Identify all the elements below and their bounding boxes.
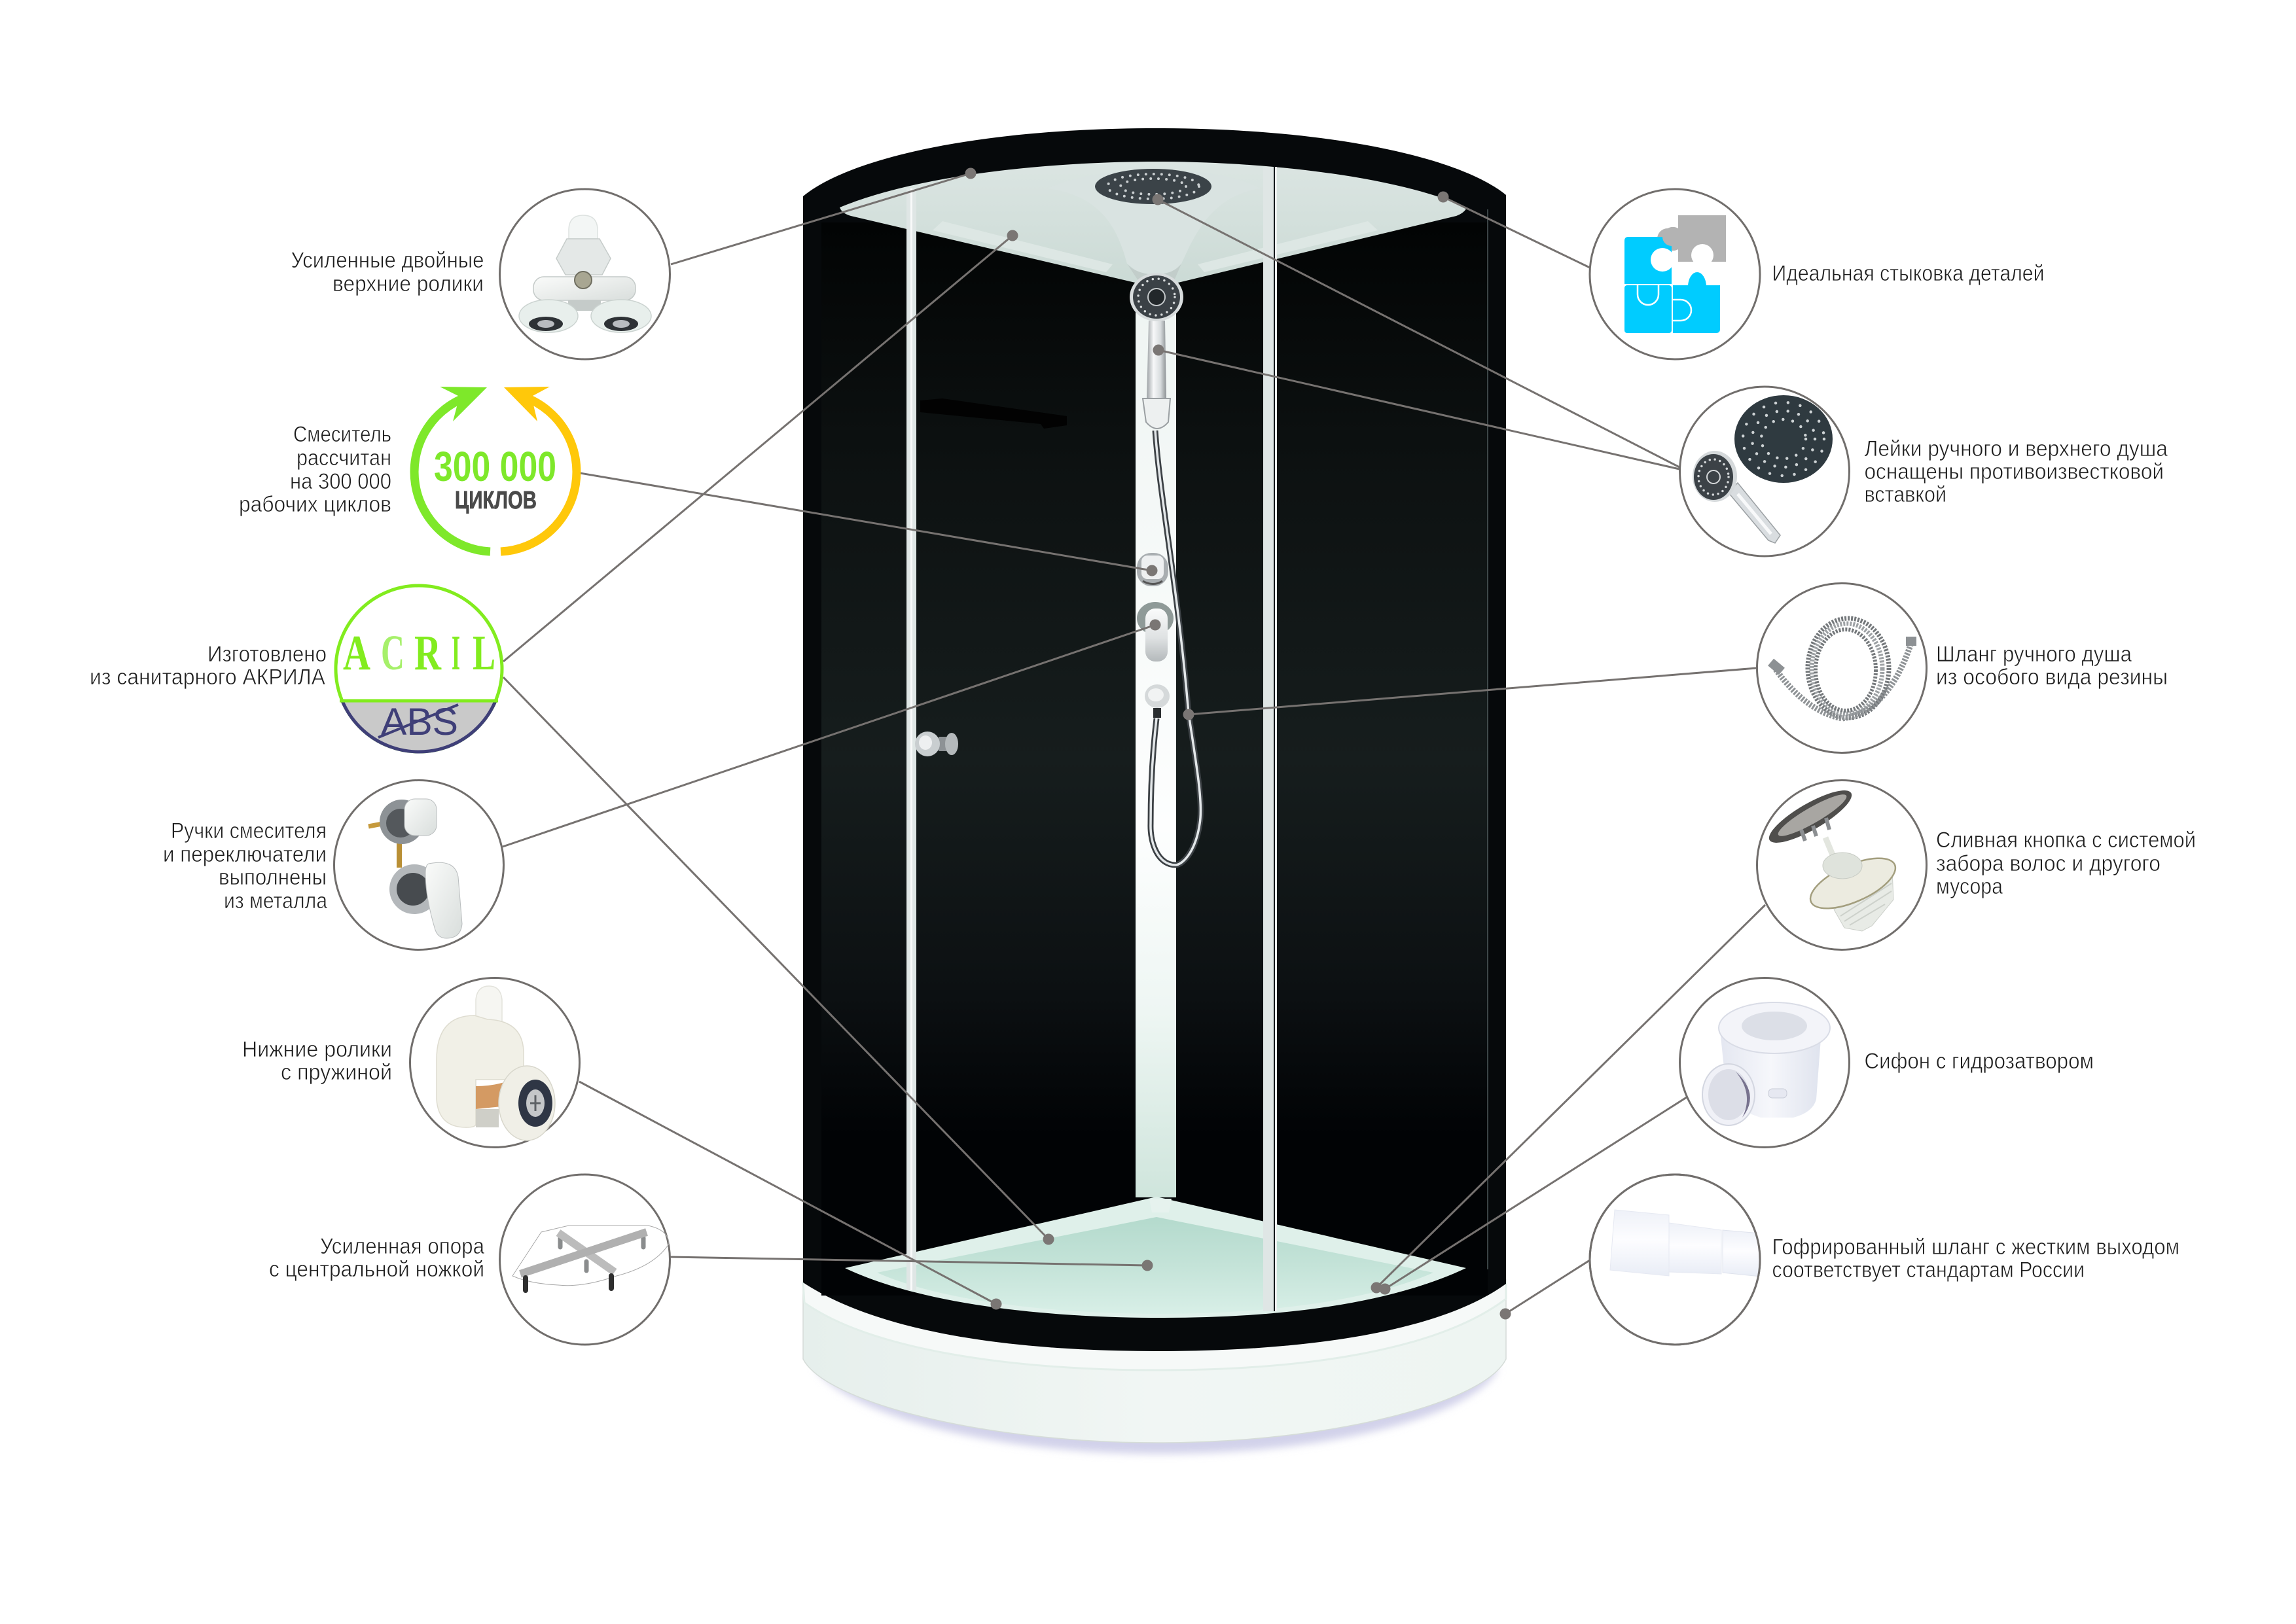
label: drain button: Сливная кнопка с системой [1936,828,2196,853]
label: drain button: мусора [1936,874,2003,899]
label: drain button: забора волос и другого [1936,851,2161,876]
icon: shower heads [1679,387,1850,556]
label: shower heads: Лейки ручного и верхнего душа [1864,436,2168,461]
badge: 300 000 cycles [414,387,577,552]
label: lower rollers [242,1037,392,1085]
label: corrugated hose: Гофрированный шланг с жестким выходом [1772,1235,2179,1260]
label: mixer cycles: на 300 000 [290,469,391,494]
label: reinforced support: с центральной ножкой [269,1257,484,1282]
cabin body [803,128,1506,1351]
connector: siphon [1380,1097,1687,1294]
label: sanitary acrylic: из санитарного АКРИЛА [90,665,325,690]
door frame strips [906,167,1488,1311]
connector: lower rollers [579,1082,1001,1310]
label: metal handles: и переключатели [163,842,327,867]
label: shower heads: вставкой [1864,482,1946,507]
connector: metal handles [503,619,1161,847]
back wall panels [821,222,1488,1296]
badge: 300 000 cycles: 300 000 [434,443,556,490]
infographic canvas [92,128,2195,1457]
icon: shower hose coil [1757,584,1927,752]
shower hose [1151,431,1200,865]
connector: mixer cycles [580,473,1157,576]
label: metal handles: из металла [224,889,327,913]
connector: upper double rollers [671,168,977,264]
connector: perfect fit [1437,191,1590,268]
label: sanitary acrylic [90,642,327,690]
label: sanitary acrylic: Изготовлено [207,642,327,667]
badge: acril not abs: A [343,626,370,680]
towel rail [920,398,1067,429]
connector: hand shower [1153,344,1679,469]
acrylic tray [803,1279,1506,1443]
badge: acril not abs [336,586,502,752]
connector: overhead shower [1152,194,1679,467]
connector: shower hose [1183,668,1757,720]
diverter knob [1137,553,1168,586]
label: drain button [1936,828,2196,899]
connector: acrylic to ceiling [503,230,1018,662]
connector: corrugated hose [1500,1260,1590,1319]
label: mixer cycles [239,422,391,517]
label: shower heads [1864,436,2168,507]
badge: acril not abs: ABS [381,701,458,743]
hand shower [1130,273,1183,429]
label: mixer cycles: рассчитан [296,446,391,470]
label: metal handles: Ручки смесителя [171,819,327,843]
tray shadow [815,1368,1499,1454]
icon: corrugated hose [1590,1174,1761,1345]
icon: upper double rollers [500,189,670,359]
badge: acril not abs: L [473,626,495,680]
icon: siphon [1679,978,1850,1148]
icon: puzzle pieces [1590,189,1760,359]
label: mixer cycles: Смеситель [293,422,391,447]
mixer handle [1137,602,1174,662]
badge: acril not abs: R [414,626,442,680]
badge: 300 000 cycles: ЦИКЛОВ [455,487,537,514]
label: hose material: Шланг ручного душа [1936,642,2132,667]
icon: support frame [500,1174,670,1345]
label: upper rollers [291,248,484,296]
shower cabin [803,128,1506,1454]
badge: acril not abs: I [452,626,460,680]
overhead shower [1095,169,1211,204]
shower column [1136,275,1176,1197]
badge: acril not abs: C [381,626,404,680]
label: lower rollers: с пружиной [281,1060,392,1085]
label: corrugated hose: соответствует стандартам России [1772,1258,2085,1282]
label: upper rollers: верхние ролики [332,272,484,296]
connector: drain button [1371,905,1765,1293]
label: metal handles: выполнены [219,865,327,890]
ceiling panel [840,162,1467,287]
floor of tray [845,1197,1466,1318]
icon: mixer handles [334,780,504,950]
label: hose material: из особого вида резины [1936,665,2168,690]
hose outlet ball [1145,684,1170,718]
connector: reinforced support [670,1257,1153,1271]
label: metal handles [163,819,327,913]
label: shower heads: оснащены противоизвестковой [1864,459,2164,484]
icon: drain button [1757,780,1927,950]
icon: lower roller [410,978,580,1148]
label: perfect fit: Идеальная стыковка деталей [1772,261,2045,286]
door knob [915,732,958,756]
label: siphon: Сифон с гидрозатвором [1864,1049,2094,1074]
label: upper rollers: Усиленные двойные [291,248,484,273]
label: hose material [1936,642,2168,690]
label: reinforced support: Усиленная опора [320,1234,484,1259]
tray rim highlight [803,1282,1506,1370]
connector: acrylic to floor [503,677,1054,1244]
label: corrugated hose [1772,1235,2179,1282]
label: lower rollers: Нижние ролики [242,1037,392,1062]
label: mixer cycles: рабочих циклов [239,492,391,517]
label: reinforced support [269,1234,484,1282]
